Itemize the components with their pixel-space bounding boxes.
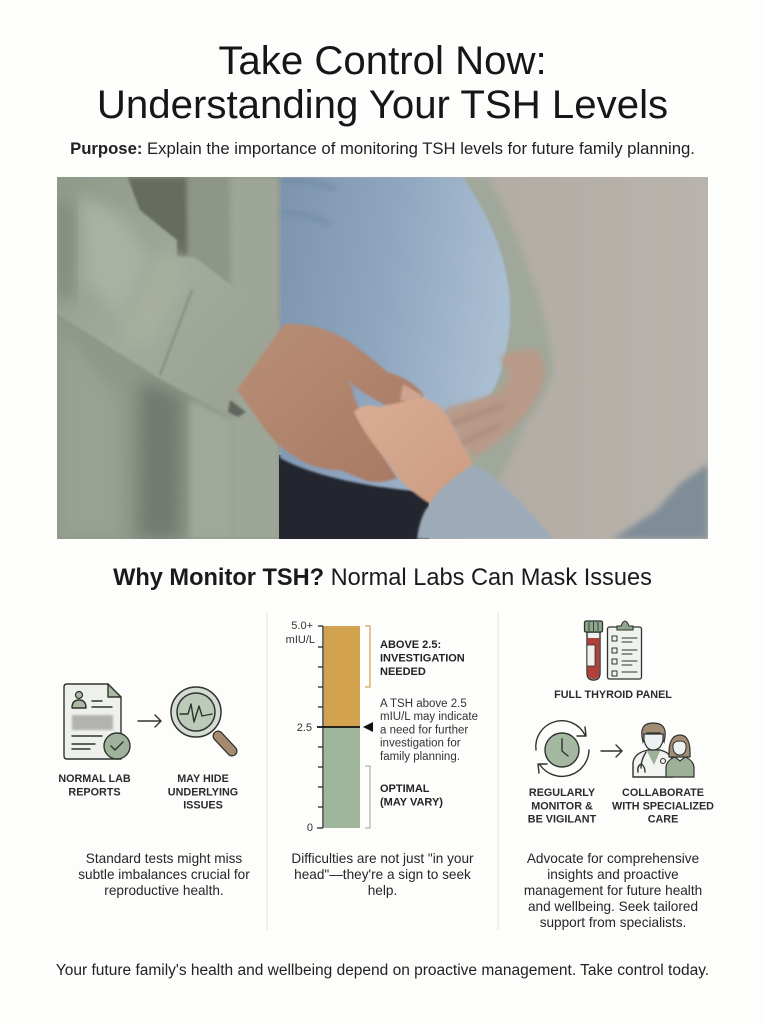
caption: management for future health bbox=[524, 883, 702, 898]
icon: lab report bbox=[64, 684, 130, 759]
label: above 2.5: ABOVE 2.5: bbox=[380, 639, 441, 651]
sleeve bbox=[58, 178, 232, 414]
belly bbox=[280, 177, 510, 492]
text: threshold note: family planning. bbox=[380, 751, 460, 763]
far hand bbox=[443, 350, 545, 457]
panel: TSH scale bbox=[286, 620, 478, 898]
bar chart: TSH scale: mIU/L bbox=[286, 634, 315, 646]
label: regularly monitor: MONITOR & bbox=[531, 800, 593, 812]
caption: support from specialists. bbox=[540, 915, 686, 930]
icon: clock with cycle arrows bbox=[536, 721, 589, 776]
text: threshold note: mIU/L may indicate bbox=[380, 711, 478, 723]
label: collaborate: WITH SPECIALIZED bbox=[612, 800, 714, 812]
pants bbox=[279, 455, 429, 539]
caption: subtle imbalances crucial for bbox=[78, 867, 250, 882]
label: normal lab reports: REPORTS bbox=[68, 786, 121, 798]
child hand bbox=[354, 397, 473, 504]
bar chart: TSH scale: 0 bbox=[307, 822, 313, 834]
label: regularly monitor: BE VIGILANT bbox=[528, 814, 597, 826]
label: may hide: MAY HIDE bbox=[177, 773, 229, 785]
title bbox=[97, 38, 668, 127]
label: optimal: OPTIMAL bbox=[380, 783, 430, 795]
title: Understanding Your TSH Levels bbox=[97, 82, 668, 127]
caption: Difficulties are not just "in your bbox=[291, 851, 474, 866]
icon: clipboard checklist bbox=[608, 621, 642, 679]
caption: Advocate for comprehensive bbox=[527, 851, 699, 866]
arrow bbox=[601, 745, 622, 757]
text: threshold note: investigation for bbox=[380, 738, 461, 750]
bar chart: TSH scale: 2.5 bbox=[297, 722, 312, 734]
label: normal lab reports: NORMAL LAB bbox=[58, 773, 131, 785]
photo: hands on pregnant belly bbox=[57, 177, 708, 539]
child sleeve bbox=[417, 465, 553, 539]
caption: help. bbox=[368, 883, 397, 898]
jacket body bbox=[57, 177, 280, 539]
panel: next steps bbox=[524, 621, 714, 930]
caption: head"—they're a sign to seek bbox=[294, 867, 471, 882]
label: optimal: (MAY VARY) bbox=[380, 796, 443, 808]
label: full thyroid panel: FULL THYROID PANEL bbox=[554, 689, 672, 701]
section heading: Why Monitor TSH? Normal Labs Can Mask Issues bbox=[113, 565, 652, 591]
child sleeve lower right bbox=[613, 464, 708, 539]
bar chart: TSH scale: 5.0+ bbox=[291, 620, 313, 632]
label: collaborate: CARE bbox=[648, 814, 678, 826]
caption: insights and proactive bbox=[547, 867, 679, 882]
icon: doctor and patient bbox=[633, 723, 694, 777]
label: regularly monitor: REGULARLY bbox=[529, 787, 595, 799]
caption: Standard tests might miss bbox=[86, 851, 242, 866]
caption: reproductive health. bbox=[104, 883, 224, 898]
title: Take Control Now: bbox=[218, 38, 547, 83]
label: may hide: UNDERLYING bbox=[168, 786, 238, 798]
text: threshold note: A TSH above 2.5 bbox=[380, 698, 467, 710]
bar chart: TSH scale bbox=[286, 620, 373, 834]
icon: blood tube bbox=[584, 621, 602, 680]
adult hand bbox=[237, 324, 423, 482]
arrow bbox=[138, 715, 161, 727]
caption: and wellbeing. Seek tailored bbox=[528, 899, 698, 914]
text: threshold note: a need for further bbox=[380, 724, 468, 736]
label: may hide: ISSUES bbox=[183, 800, 223, 812]
label: above 2.5: INVESTIGATION bbox=[380, 652, 465, 664]
purpose line: Purpose: Explain the importance of monitoring TSH levels for future family planning. bbox=[70, 139, 695, 158]
label: above 2.5: NEEDED bbox=[380, 666, 426, 678]
label: collaborate: COLLABORATE bbox=[622, 787, 704, 799]
panel: normal labs bbox=[58, 684, 250, 898]
icon: magnifier bbox=[171, 687, 232, 751]
far jacket side bbox=[460, 177, 553, 485]
footer statement: Your future family's health and wellbeing depend on proactive management. Take control today. bbox=[56, 962, 709, 979]
